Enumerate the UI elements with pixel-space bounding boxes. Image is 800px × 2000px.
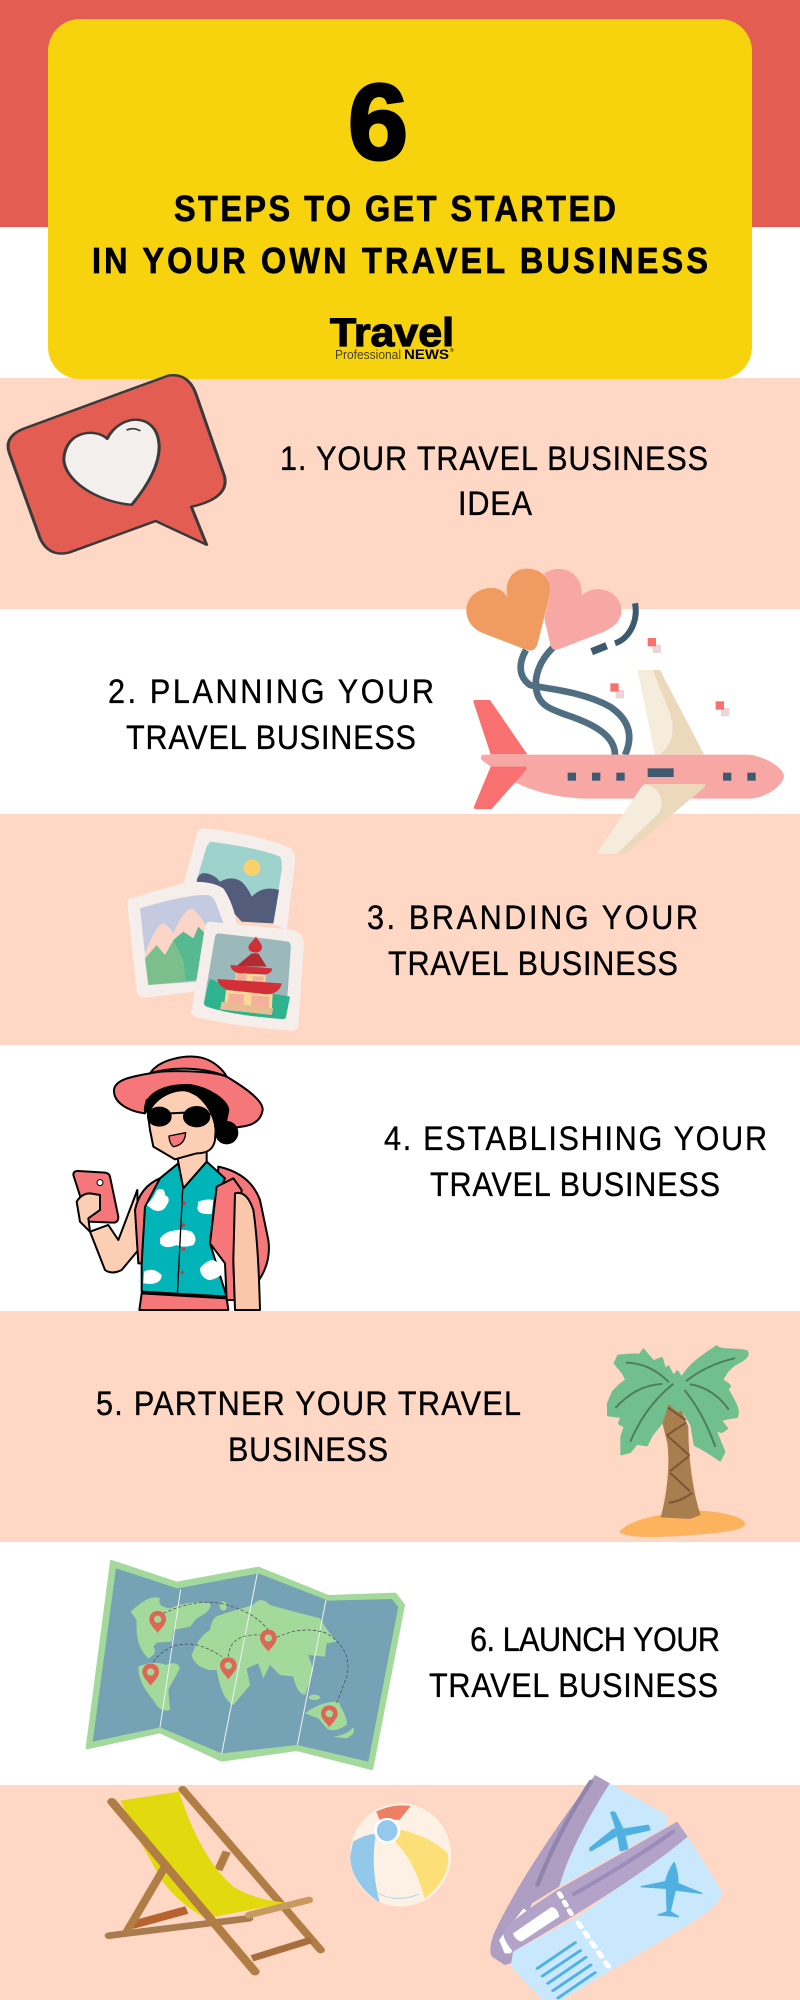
icon: palm tree bbox=[608, 1347, 747, 1537]
logo: Travel bbox=[330, 311, 454, 355]
icon: airplane with heart balloons bbox=[466, 569, 784, 854]
title heading: IN YOUR OWN TRAVEL BUSINESS bbox=[92, 241, 708, 281]
logo: NEWS bbox=[404, 346, 449, 362]
icon: woman traveller with phone bbox=[73, 1057, 269, 1310]
icon: deck chair bbox=[109, 1789, 321, 1972]
icon: beach ball bbox=[350, 1803, 451, 1907]
step 1 text: IDEA bbox=[458, 485, 532, 522]
logo: ® bbox=[450, 347, 454, 354]
step 6 text: 6. LAUNCH YOUR bbox=[470, 1621, 720, 1658]
step 1 text bbox=[280, 440, 708, 522]
icon: airline tickets bbox=[490, 1775, 722, 2000]
step 6 text bbox=[429, 1621, 720, 1704]
step 5 text bbox=[96, 1385, 521, 1468]
icon: heart speech bubble bbox=[8, 375, 225, 554]
step 5 text: BUSINESS bbox=[228, 1431, 388, 1468]
panel: header card bbox=[48, 19, 752, 379]
title heading bbox=[92, 189, 708, 281]
step 4 text: 4. ESTABLISHING YOUR bbox=[384, 1120, 767, 1157]
step 2 text: TRAVEL BUSINESS bbox=[126, 719, 416, 756]
step 6 text: TRAVEL BUSINESS bbox=[429, 1667, 718, 1704]
step 3 text: 3. BRANDING YOUR bbox=[367, 899, 698, 936]
step 4 text bbox=[384, 1120, 767, 1203]
step 3 text: TRAVEL BUSINESS bbox=[388, 945, 678, 982]
logo: Professional bbox=[335, 347, 401, 362]
title number: 6 bbox=[348, 61, 408, 182]
step 2 text bbox=[108, 673, 434, 756]
step 5 text: 5. PARTNER YOUR TRAVEL bbox=[96, 1385, 521, 1422]
icon: travel photos bbox=[127, 828, 304, 1031]
step 4 text: TRAVEL BUSINESS bbox=[430, 1166, 720, 1203]
icon: folded world map bbox=[87, 1562, 403, 1768]
step 2 text: 2. PLANNING YOUR bbox=[108, 673, 434, 710]
step 1 text: 1. YOUR TRAVEL BUSINESS bbox=[280, 440, 708, 477]
title heading: STEPS TO GET STARTED bbox=[174, 189, 616, 229]
step 3 text bbox=[367, 899, 698, 982]
